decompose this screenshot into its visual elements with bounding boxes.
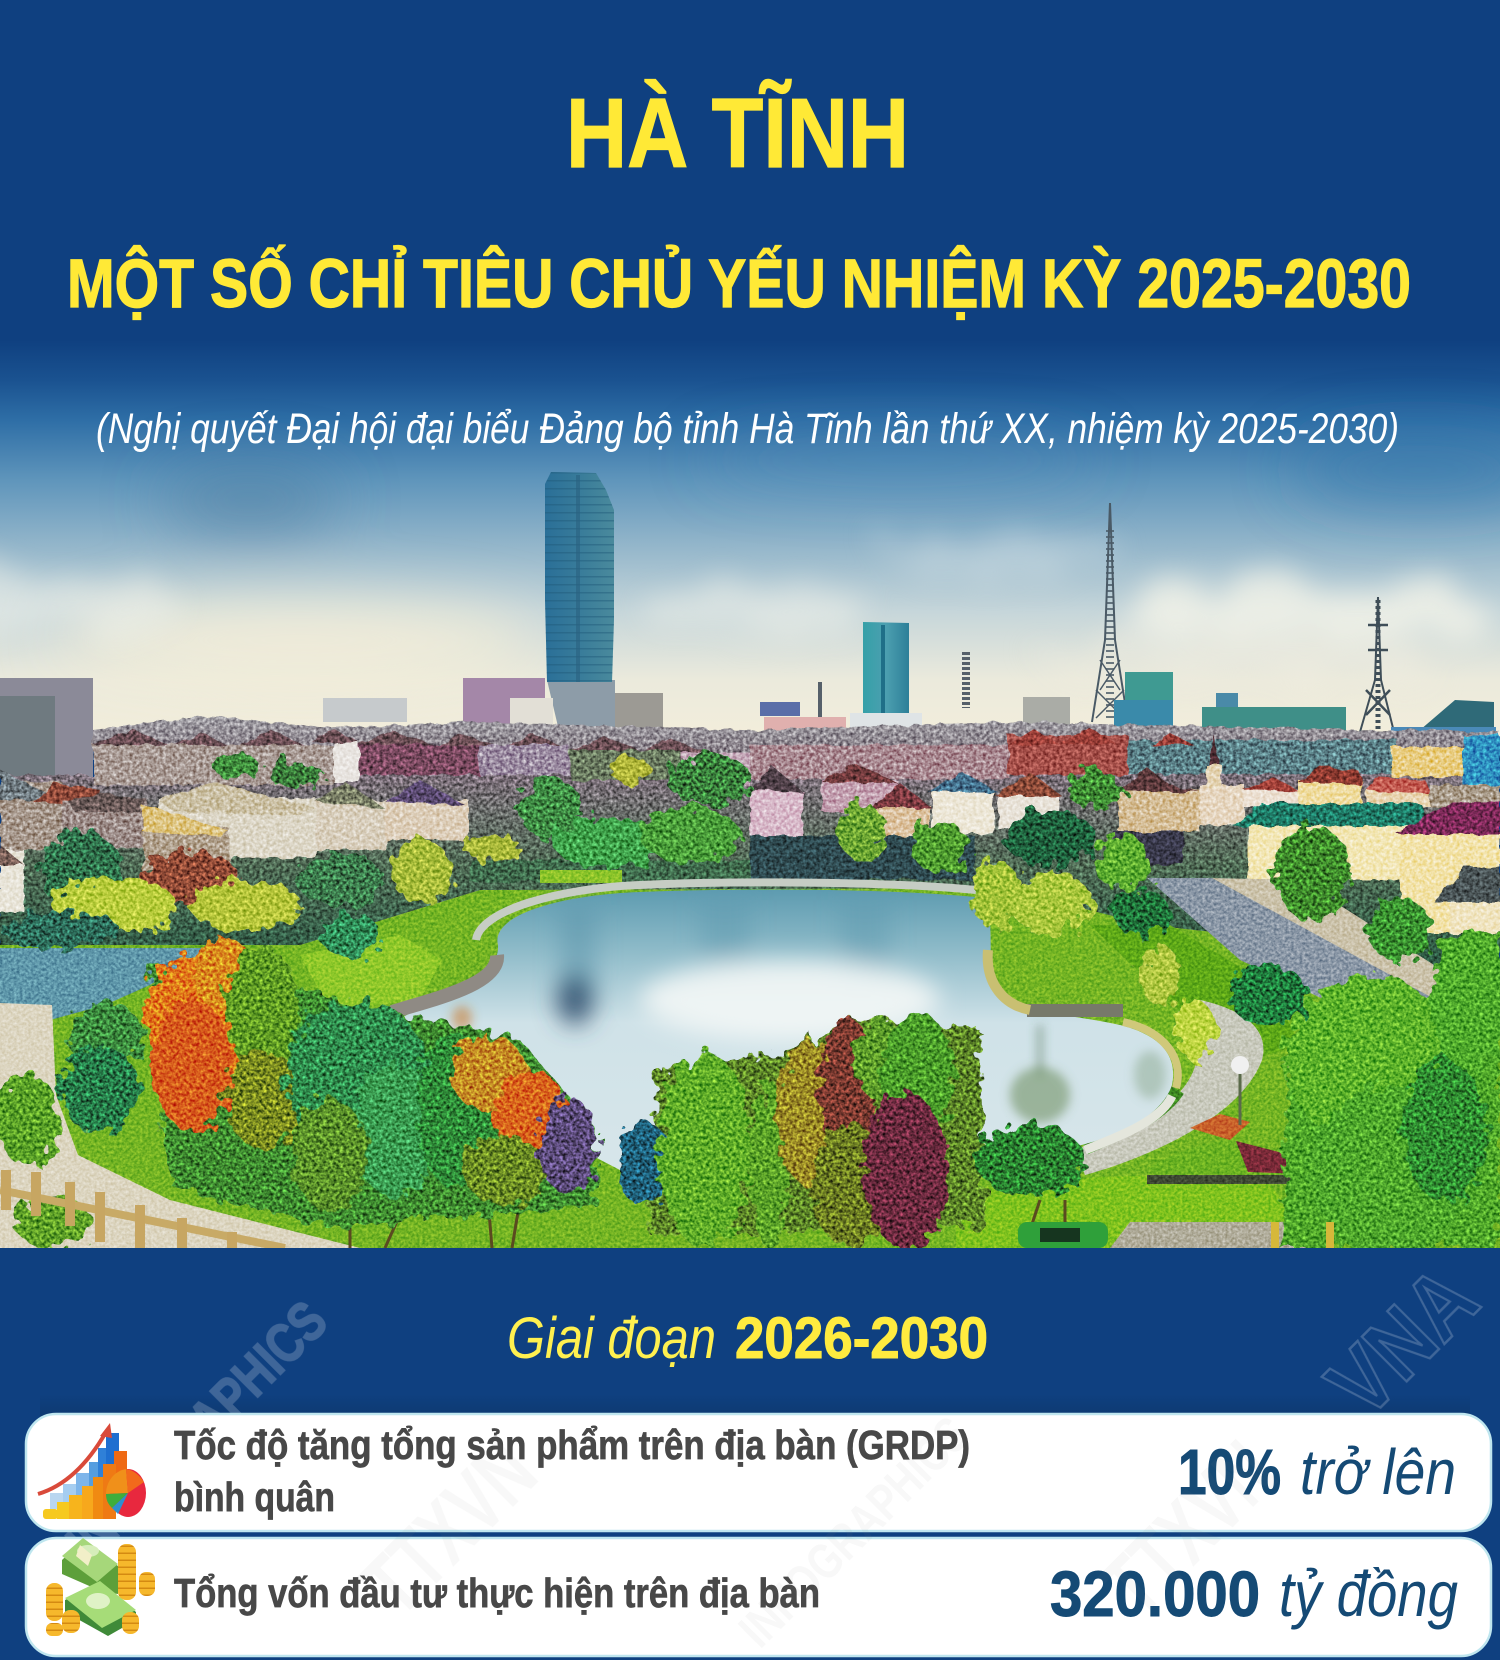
value: 320.000 [1050,1558,1458,1630]
lake [398,889,1173,1187]
watermark on navy [54,1247,1497,1573]
back row roofs and walls [93,729,706,752]
period heading: Giai đoạn [507,1306,716,1371]
icon: money and coins [46,1538,155,1636]
mid-ground trees [0,752,1432,1005]
label: GRDP: Tốc độ tăng tổng sản phẩm trên địa bàn (GRDP) [174,1422,970,1468]
tree mass right [1280,930,1500,1248]
right mast lattice [1360,597,1394,732]
middle row houses left [0,782,62,850]
watermark on cards [343,1406,1295,1658]
value: 320.000: 320.000 [1050,1558,1260,1630]
lake embankment [392,882,1178,1150]
value: 320.000: tỷ đồng [1279,1558,1458,1630]
ground and lawns [0,870,1500,1248]
tree trunks [350,1200,1065,1248]
title: HÀ TĨNH [566,78,909,188]
watermark on cards: INFOGRAPHICS [728,1406,980,1658]
value: 10% [1178,1436,1456,1508]
far buildings and towers [0,472,1496,778]
watermark on navy: INFOGRAPHICS [54,1289,339,1573]
card: investment capital [26,1538,1491,1656]
period heading [507,1306,988,1371]
watermark on cards: TTXVN [343,1422,555,1633]
card: GRDP growth [26,1414,1491,1531]
foreground trees [0,930,1500,1254]
value: 10%: 10% [1178,1436,1281,1508]
TV tower lattice [1092,503,1128,722]
period heading: 2026-2030 [735,1306,988,1371]
label: GRDP: bình quân [174,1474,335,1520]
dark street frontage [750,836,975,880]
tree mass left [148,965,598,1228]
photo: Hà Tĩnh city panorama [0,340,1500,1254]
watermark on cards: TTXVN [1083,1422,1295,1633]
town houses band [0,716,1500,965]
label: GRDP [174,1422,970,1520]
label: investment: Tổng vốn đầu tư thực hiện trên địa bàn [174,1570,820,1616]
shadow above cards [40,1394,1470,1416]
large buildings right [1248,826,1420,880]
main tower [545,472,614,682]
lower details: fence, cart, lamp [0,1056,1330,1248]
value: 10%: trở lên [1300,1436,1456,1508]
middle row houses right [750,790,803,838]
tree mass centre [650,1018,985,1235]
icon: bar chart with arrow and pie [38,1423,146,1519]
sky with clouds [0,340,1500,740]
second tower [863,622,909,713]
